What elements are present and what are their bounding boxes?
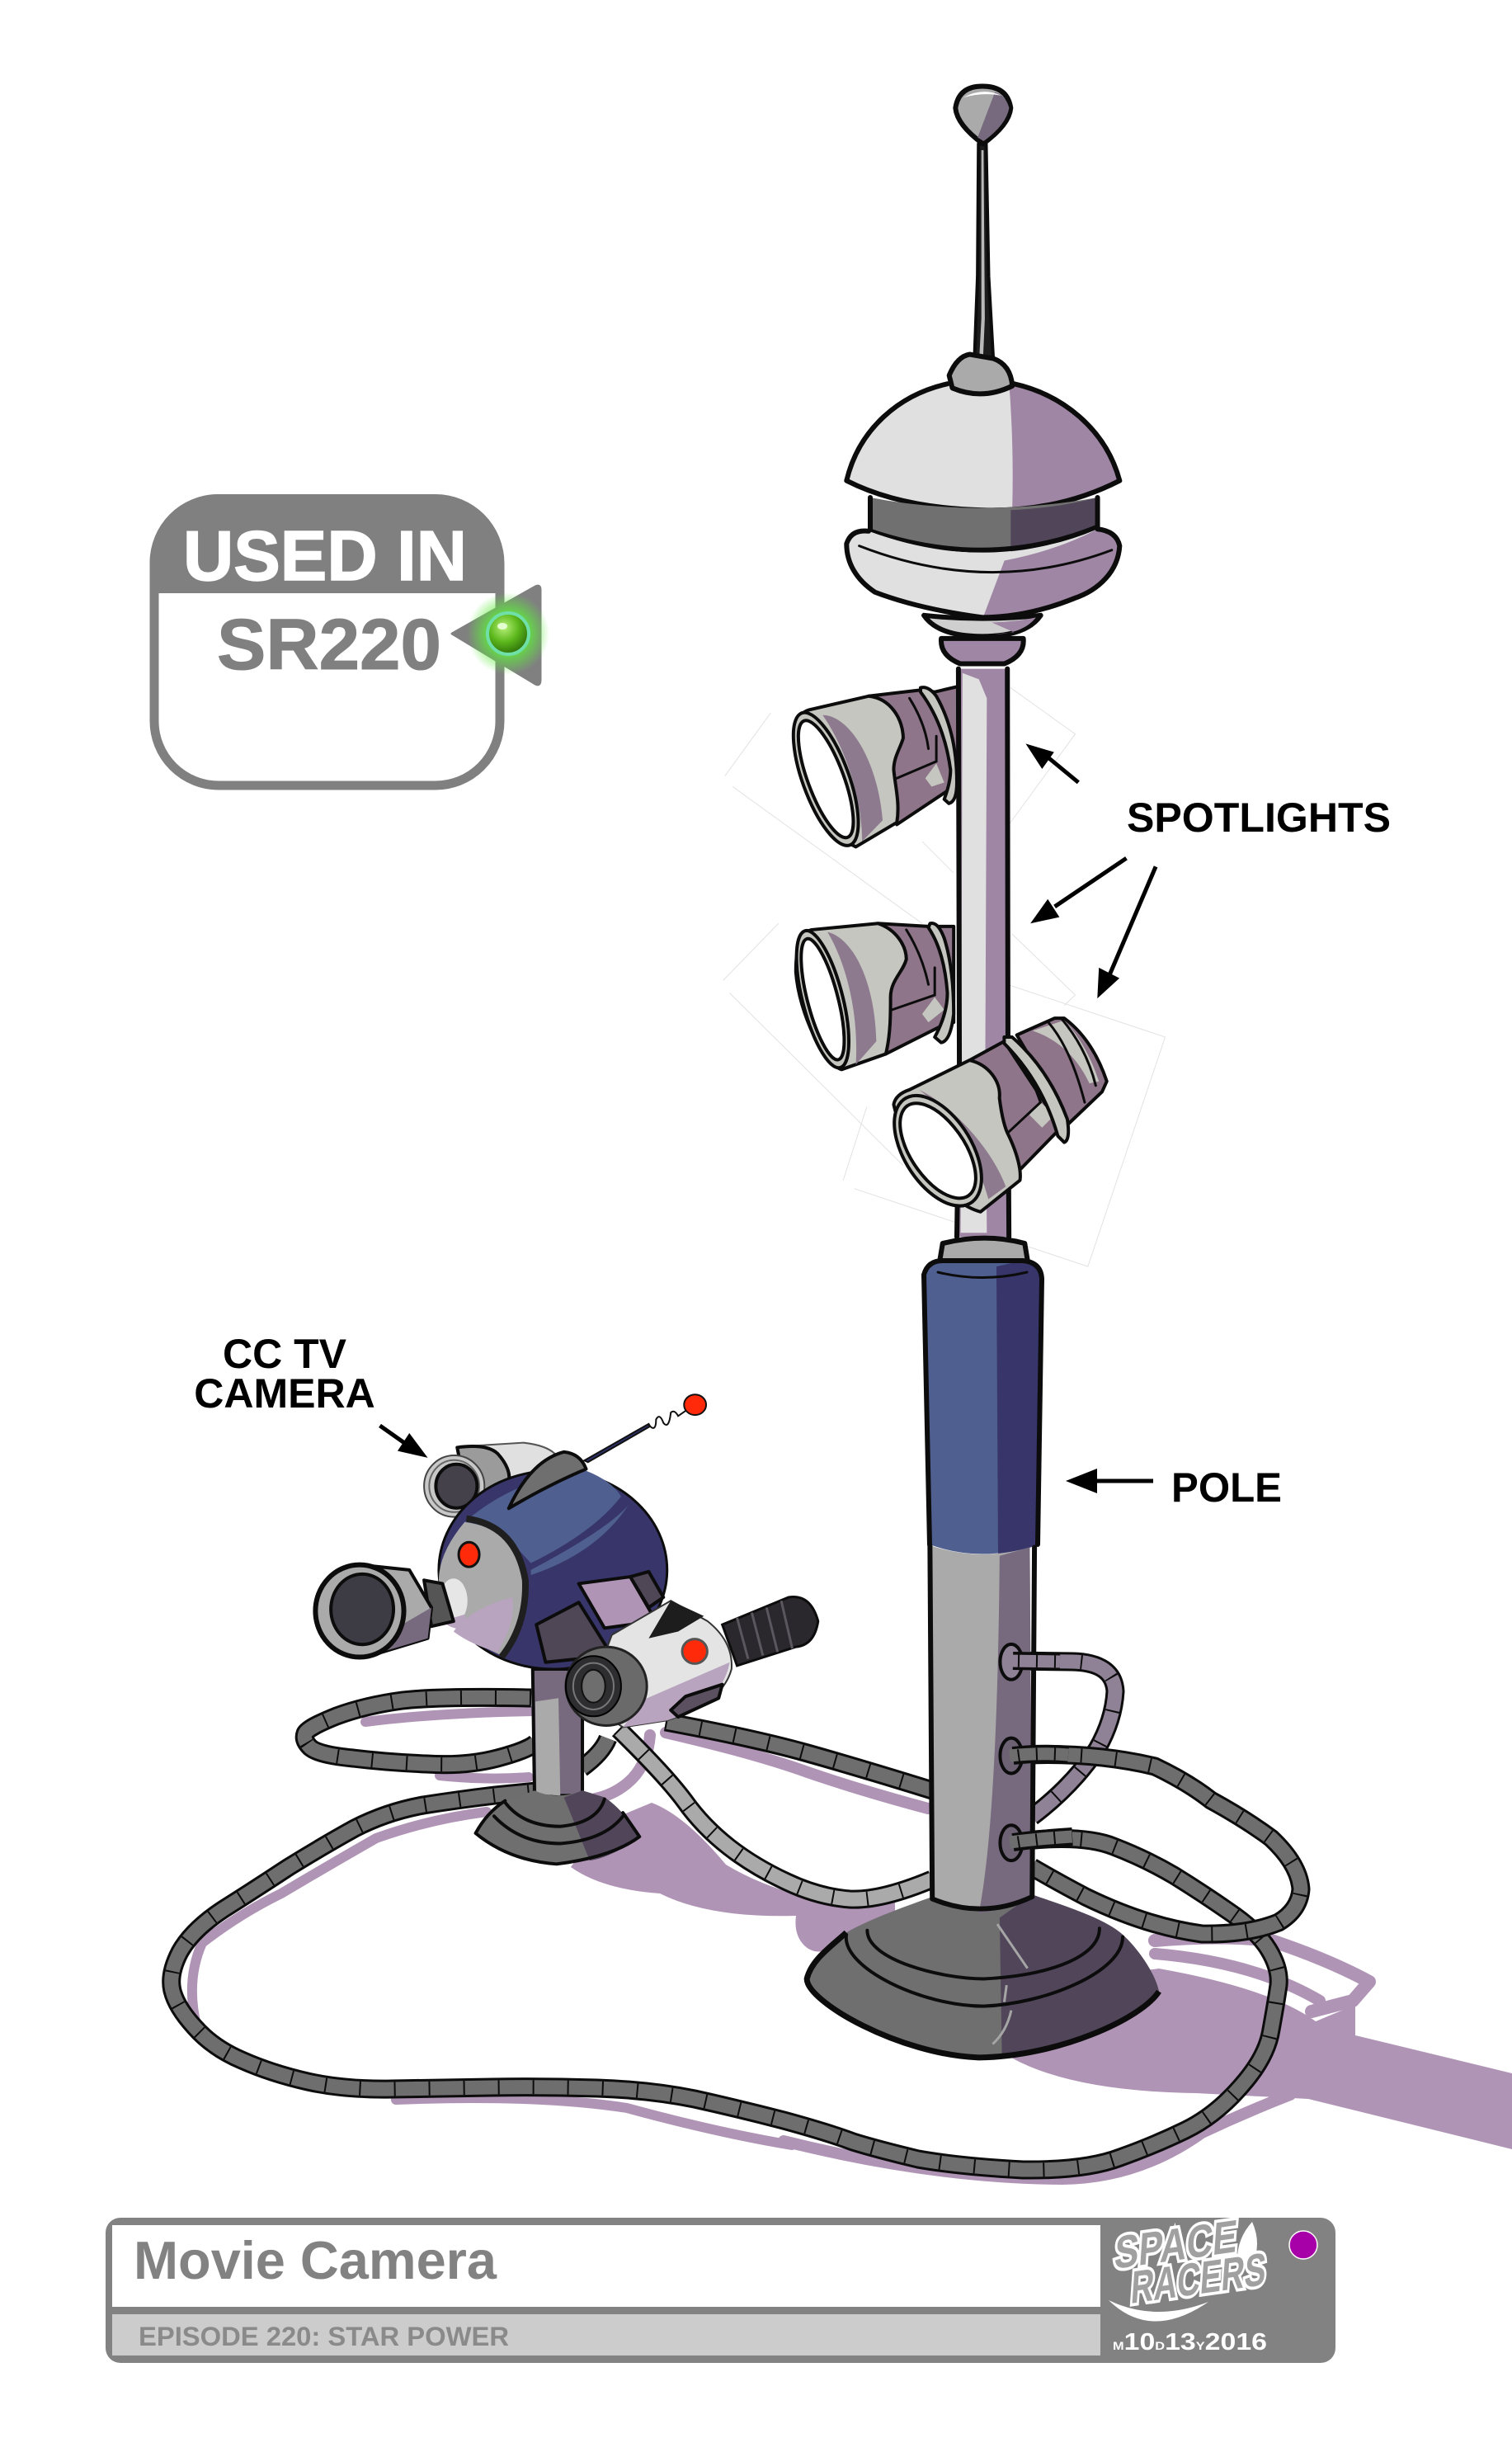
pole shaft xyxy=(957,669,1009,1237)
hose: small loop xyxy=(304,1697,608,1768)
episode subtitle: EPISODE 220: STAR POWER xyxy=(139,2322,509,2351)
base xyxy=(807,1894,1159,2058)
mounting bracket xyxy=(536,1572,663,1662)
front camera xyxy=(315,1565,469,1658)
title field xyxy=(112,2225,1100,2307)
status dot xyxy=(1289,2231,1317,2259)
logo: space racers: SPACE xyxy=(1113,2209,1239,2279)
camera face xyxy=(439,1519,528,1658)
panel: used in badge xyxy=(150,494,549,785)
heading: used in: USED IN xyxy=(183,517,467,596)
dome cap xyxy=(949,354,1012,394)
label: spotlights: SPOTLIGHTS xyxy=(1127,795,1391,841)
hose: middle pole loop xyxy=(1011,1755,1301,1934)
blue sleeve collar xyxy=(940,1238,1028,1271)
cctv camera xyxy=(315,1394,818,1864)
label: cc tv camera: CAMERA xyxy=(194,1370,375,1417)
hose: top pole loop xyxy=(1011,1661,1115,1817)
title: Movie Camera xyxy=(134,2230,497,2290)
antenna xyxy=(584,1394,706,1462)
pointer triangle xyxy=(452,586,540,685)
faint tracing lines xyxy=(723,688,1166,1266)
badge header xyxy=(150,494,504,593)
dark band xyxy=(870,498,1098,552)
episode code: SR220 xyxy=(217,605,441,685)
logo: space racers xyxy=(1109,2209,1268,2322)
top camera xyxy=(424,1443,555,1517)
label: cc tv camera: CC TV xyxy=(223,1331,347,1377)
stand base xyxy=(476,1790,639,1864)
blue pole sleeve xyxy=(924,1261,1042,1555)
side camera xyxy=(566,1597,818,1728)
flange xyxy=(924,615,1041,636)
panel: title bar xyxy=(106,2209,1335,2363)
spotlight: top xyxy=(780,686,962,858)
label: pole: POLE xyxy=(1171,1464,1282,1511)
hose stubs in front of pole xyxy=(1010,1661,1072,1842)
date: M10 D13 Y2016 xyxy=(1113,2329,1267,2355)
lower shaft xyxy=(930,1545,1034,1913)
badge frame xyxy=(154,499,500,785)
arrow: pole xyxy=(1066,1469,1153,1493)
hose: large loop xyxy=(172,1790,1279,2170)
hose: camera to pole xyxy=(666,1722,932,1790)
sphere fin xyxy=(509,1452,586,1508)
spotlight: middle xyxy=(786,922,954,1076)
arrows: spotlights xyxy=(1025,743,1156,998)
spotlights behind pole xyxy=(780,669,1107,1271)
pole base and lower shaft xyxy=(807,1545,1159,2058)
hoses xyxy=(172,1661,1301,2170)
title bar frame xyxy=(106,2218,1335,2363)
logo: space racers: RACERS xyxy=(1129,2242,1268,2313)
spotlight: lower xyxy=(879,1018,1107,1227)
camera sphere xyxy=(439,1471,667,1669)
pole tower head xyxy=(846,86,1119,663)
dome xyxy=(846,384,1119,510)
antenna rod xyxy=(974,144,993,361)
collar xyxy=(941,639,1024,663)
stand pole xyxy=(533,1669,582,1795)
hose sockets xyxy=(1000,1644,1022,1860)
subtitle field xyxy=(112,2314,1100,2355)
arrow: cc tv camera xyxy=(380,1426,428,1458)
hose: light cable xyxy=(619,1729,932,1899)
antenna knob xyxy=(955,86,1010,144)
icon: green led xyxy=(467,592,549,675)
lower disc xyxy=(846,529,1119,617)
ground shadows xyxy=(192,1711,1512,2179)
